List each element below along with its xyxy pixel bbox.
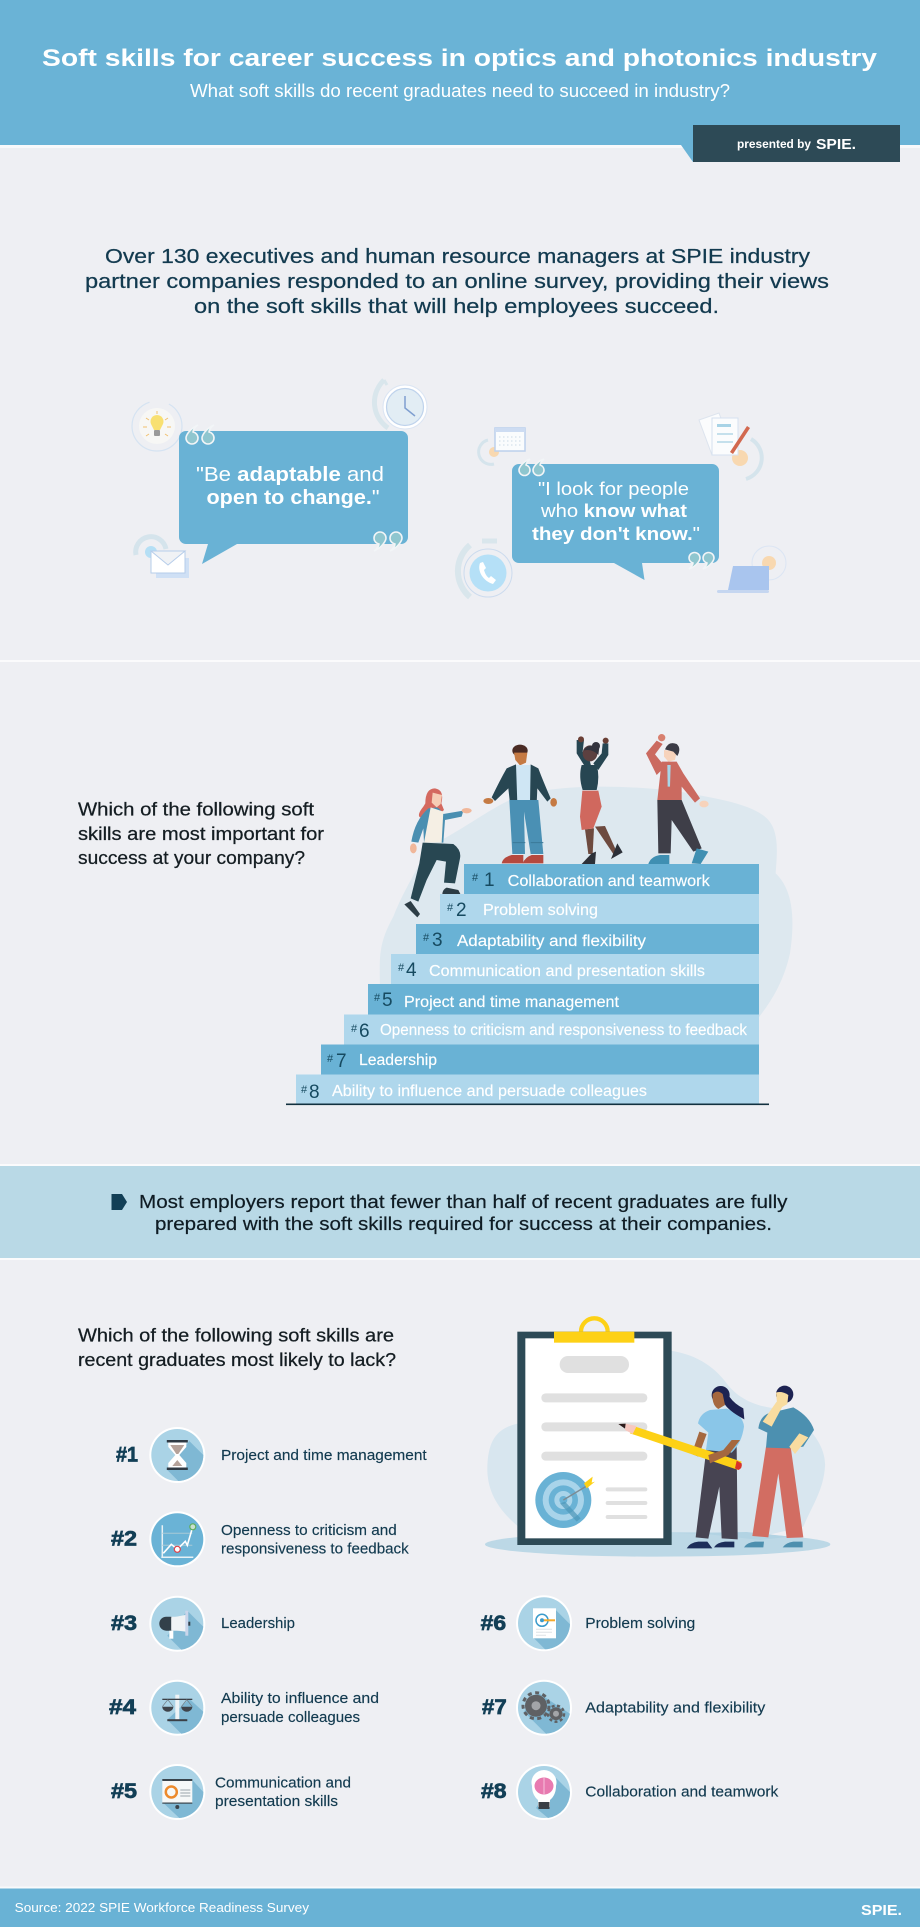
question 1: skills are most important for <box>78 824 324 844</box>
person 3: woman cheering <box>577 736 623 864</box>
people climbing <box>404 734 709 917</box>
person: man thinking <box>744 1386 814 1547</box>
person 1: woman climbing <box>404 788 472 917</box>
step 2: 2 <box>456 900 467 921</box>
callout text: Most employers report that fewer than half of recent graduates are fully <box>139 1192 788 1212</box>
rank item 6 <box>481 1595 695 1651</box>
rank item 3: #3 <box>111 1612 137 1635</box>
icon: scales <box>149 1680 205 1736</box>
person 4: man waving <box>646 734 709 864</box>
icon: envelope <box>136 537 189 578</box>
label: Communication and <box>215 1775 351 1791</box>
step 3 <box>416 924 759 954</box>
target <box>535 1472 591 1528</box>
rank item 4: #4 <box>109 1696 136 1719</box>
rank item 7 <box>482 1680 766 1736</box>
step 2: Problem solving <box>483 902 598 919</box>
label: responsiveness to feedback <box>221 1542 409 1558</box>
callout text <box>139 1192 788 1234</box>
intro text <box>85 245 829 318</box>
rank item 6: #6 <box>481 1612 506 1635</box>
step 5: # <box>374 992 381 1004</box>
closing quote mark <box>374 532 402 551</box>
icon: megaphone <box>149 1596 205 1652</box>
step 1: 1 <box>484 870 495 891</box>
step 5 <box>368 984 759 1014</box>
step 4: Communication and presentation skills <box>429 963 705 980</box>
step 4: # <box>398 962 405 974</box>
label: Openness to criticism and <box>221 1523 397 1539</box>
clipboard <box>517 1332 672 1545</box>
footer bar <box>0 1886 920 1927</box>
icon: presentation board <box>149 1764 205 1820</box>
person: woman with pencil <box>618 1386 744 1548</box>
icon: hourglass <box>149 1427 205 1483</box>
label <box>221 1691 379 1726</box>
step 2: # <box>447 902 454 914</box>
label: Ability to influence and <box>221 1691 379 1707</box>
icon: arrow marker <box>112 1194 127 1210</box>
ground shadow <box>485 1532 830 1557</box>
rank item 5 <box>111 1764 351 1820</box>
question 2 <box>78 1326 396 1370</box>
SPIE logo: SPIE. <box>861 1902 902 1919</box>
step 1: # <box>472 872 479 884</box>
icon: clock <box>374 380 427 429</box>
rank item 1 <box>116 1427 427 1483</box>
rank item 1: #1 <box>116 1444 138 1467</box>
icon: brain bulb <box>516 1764 572 1820</box>
step 8: # <box>301 1084 308 1096</box>
label: Collaboration and teamwork <box>585 1785 779 1801</box>
rank item 3 <box>111 1596 295 1652</box>
step 8: Ability to influence and persuade colleagues <box>332 1083 647 1100</box>
step 7: 7 <box>336 1051 347 1072</box>
rank item 5: #5 <box>111 1780 137 1803</box>
question 1: success at your company? <box>78 848 305 868</box>
label: presentation skills <box>215 1794 338 1810</box>
icon: gears <box>516 1680 572 1736</box>
opening quote mark <box>519 459 544 476</box>
step 5: 5 <box>382 990 393 1011</box>
rank item 2 <box>111 1511 409 1567</box>
rank item 8 <box>481 1764 779 1820</box>
subtitle: What soft skills do recent graduates need to succeed in industry? <box>190 81 730 101</box>
callout band <box>0 1164 920 1260</box>
icon: document target <box>516 1595 572 1651</box>
step 8 <box>296 1074 759 1104</box>
icon: calendar <box>479 428 525 464</box>
step 4 <box>391 954 759 984</box>
question 1: Which of the following soft <box>78 800 314 820</box>
clipboard illustration <box>485 1318 830 1557</box>
callout text: prepared with the soft skills required for success at their companies. <box>155 1214 772 1234</box>
intro text: partner companies responded to an online survey, providing their views <box>85 270 829 293</box>
rank item 7: #7 <box>482 1696 507 1719</box>
background blob <box>487 1351 825 1540</box>
step 8: 8 <box>309 1082 320 1103</box>
icon: light bulb <box>132 401 182 451</box>
rank item 4 <box>109 1680 379 1736</box>
pencil <box>630 1426 742 1470</box>
presented by badge: SPIE. <box>816 136 856 153</box>
step 3: Adaptability and flexibility <box>457 933 646 950</box>
step 6: 6 <box>359 1021 370 1042</box>
background blob behind stairs <box>380 787 792 1020</box>
intro text: on the soft skills that will help employees succeed. <box>194 295 719 318</box>
step 4: 4 <box>406 960 417 981</box>
quote bubble 2: they don't know. " <box>532 524 700 544</box>
step 7: Leadership <box>359 1052 437 1069</box>
label: Leadership <box>221 1616 295 1632</box>
quote bubble 1: open to change. " <box>206 487 380 509</box>
label <box>221 1523 409 1558</box>
step 3: # <box>423 932 430 944</box>
step 3: 3 <box>432 930 443 951</box>
label: Problem solving <box>585 1616 695 1632</box>
label <box>215 1775 351 1810</box>
step 5: Project and time management <box>404 994 620 1011</box>
step 7 <box>321 1044 759 1074</box>
label: persuade colleagues <box>221 1710 360 1726</box>
source text: Source: 2022 SPIE Workforce Readiness Survey <box>15 1900 310 1915</box>
staircase chart <box>286 864 769 1105</box>
label: Adaptability and flexibility <box>585 1700 766 1716</box>
step 7: # <box>327 1053 334 1065</box>
section divider <box>0 660 920 662</box>
header banner <box>0 0 920 162</box>
label: Project and time management <box>221 1448 427 1464</box>
icon: phone <box>458 541 512 597</box>
quote bubble 1 <box>179 425 408 564</box>
title: Soft skills for career success in optics and photonics industry <box>42 45 877 72</box>
step 2 <box>440 894 759 924</box>
step 6: Openness to criticism and responsiveness to feedback <box>380 1022 747 1039</box>
step 6 <box>344 1014 759 1044</box>
icon: papers and pen <box>699 413 762 479</box>
intro text: Over 130 executives and human resource managers at SPIE industry <box>105 245 811 268</box>
icon: laptop <box>717 546 786 593</box>
icon: chart <box>149 1511 205 1567</box>
opening quote mark <box>186 425 214 444</box>
rank item 2: #2 <box>111 1528 137 1551</box>
question 1 <box>78 800 324 868</box>
closing quote mark <box>689 553 714 569</box>
step 1: Collaboration and teamwork <box>508 873 710 890</box>
quote text: "Be adaptable and <box>196 464 384 486</box>
person 2: man standing <box>483 745 557 863</box>
question 2: recent graduates most likely to lack? <box>78 1350 396 1370</box>
step 1 <box>464 864 759 894</box>
presented by badge: presented by <box>737 139 812 151</box>
quote text: "I look for people <box>538 479 689 499</box>
quote bubble 2: who know what <box>540 501 687 521</box>
question 2: Which of the following soft skills are <box>78 1326 394 1346</box>
quote bubble 2 <box>512 459 719 580</box>
step 6: # <box>351 1023 358 1035</box>
rank item 8: #8 <box>481 1780 507 1803</box>
presented by badge <box>681 125 900 162</box>
